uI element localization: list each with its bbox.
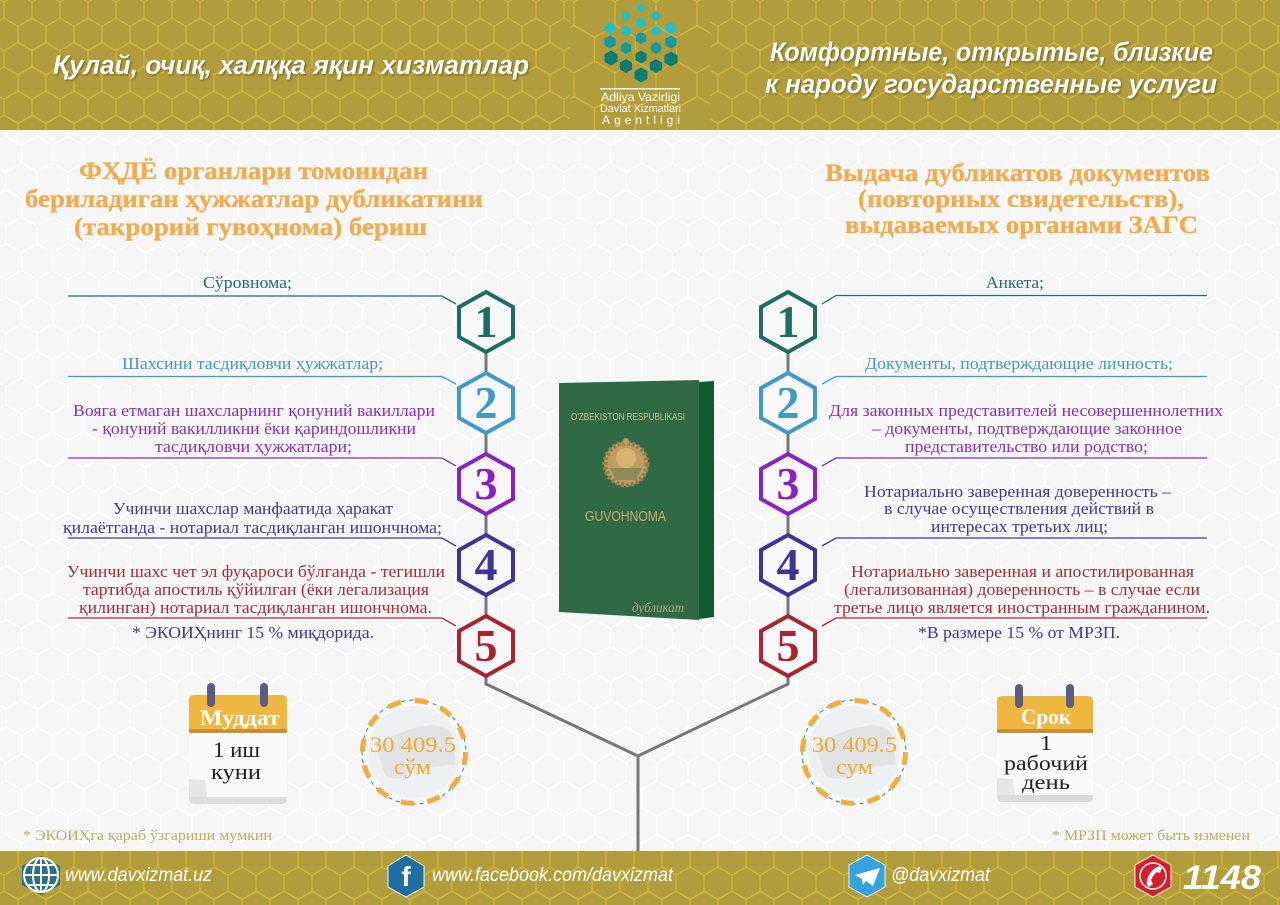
list: right: третье лицо является иностранным гражданином.	[834, 598, 1210, 617]
numbered hexagons: left: 3	[474, 458, 498, 509]
heading: right: выдаваемых органами ЗАГС	[845, 212, 1198, 239]
facebook text: www.facebook.com/davxizmat	[432, 865, 674, 886]
heading: left: ФҲДЁ органлари томонидан	[79, 158, 428, 185]
heading: left: (такрорий гувоҳнома) бериш	[74, 214, 427, 241]
document booklet: O'ZBEKISTON RESPUBLIKASI	[571, 412, 685, 423]
numbered hexagons: right: 2	[776, 377, 800, 428]
list: left: Вояга етмаган шахсларнинг қонуний вакиллари	[73, 401, 435, 420]
header title: Russian	[765, 37, 1217, 99]
heading: right: (повторных свидетельств),	[858, 186, 1184, 213]
icon: facebook: f	[401, 861, 411, 892]
calendar: right: рабочий	[1004, 751, 1088, 775]
list: left: тартибда апостиль қўйилган (ёки легализация	[83, 580, 429, 599]
list: left: тасдиқловчи ҳужжатлари;	[155, 437, 352, 456]
calendar: left: куни	[211, 759, 261, 784]
logo: Agentligi	[602, 113, 680, 127]
logo: Adliya Vazirligi	[601, 90, 680, 104]
icon: globe	[22, 856, 60, 895]
document booklet	[559, 380, 714, 620]
heading: left	[25, 158, 483, 241]
list: left: қилаётганда - нотариал тасдиқланган ишончнома;	[63, 518, 442, 537]
numbered hexagons: right: 3	[776, 458, 800, 509]
list: right: Анкета;	[986, 273, 1044, 292]
list: right: Для законных представителей несовершеннолетних	[829, 401, 1224, 420]
footnote: right: * МРЗП может быть изменен	[1052, 828, 1250, 844]
list: left	[63, 273, 445, 642]
icon: phone	[1135, 855, 1171, 897]
price badge: left	[362, 700, 466, 804]
leader lines: right	[822, 296, 1207, 626]
calendar: right	[997, 684, 1093, 802]
website text: www.davxizmat.uz	[65, 865, 212, 886]
list: right	[829, 273, 1224, 642]
list: right: *В размере 15 % от МРЗП.	[918, 623, 1120, 642]
heading: right: Выдача дубликатов документов	[825, 160, 1210, 187]
numbered hexagons: right: 4	[776, 539, 800, 590]
footer band	[0, 851, 1280, 905]
connector tree	[486, 300, 788, 851]
calendar: right: Срок	[1021, 704, 1071, 729]
calendar: left: 1 иш	[213, 737, 260, 762]
numbered hexagons: left: 5	[474, 620, 498, 671]
price badge: left: 30 409.5	[370, 732, 456, 757]
list: left: Сўровнома;	[203, 273, 292, 292]
header title: Uzbek: Қулай, очиқ, халққа яқин хизматлар	[53, 50, 529, 80]
logo	[600, 4, 681, 127]
leader lines: left	[68, 296, 456, 626]
icon: telegram	[849, 855, 885, 897]
calendar: left	[189, 683, 287, 804]
header band	[0, 0, 1280, 130]
list: right: интересах третьих лиц;	[931, 517, 1108, 536]
numbered hexagons: left: 1	[474, 296, 498, 347]
heading: left: бериладиган ҳужжатлар дубликатини	[25, 186, 483, 213]
list: left: Шахсини тасдиқловчи ҳужжатлар;	[122, 354, 383, 373]
numbered hexagons: right	[761, 292, 815, 676]
list: left: - қонуний вакилликни ёки қариндошликни	[92, 419, 416, 438]
telegram text: @davxizmat	[891, 865, 991, 886]
document booklet: GUVOHNOMA	[585, 508, 666, 525]
header title: Russian: к народу государственные услуги	[765, 69, 1217, 99]
heading: right	[825, 160, 1210, 239]
price badge: right	[802, 700, 906, 804]
list: right: представительство или родство;	[905, 437, 1148, 456]
document booklet: дубликат	[632, 601, 684, 616]
calendar: left: Муддат	[200, 705, 280, 730]
footnote: left: * ЭКОИҲга қараб ўзгариши мумкин	[23, 828, 272, 844]
list: right: Нотариально заверенная доверенность –	[864, 482, 1172, 501]
hotline number: 1148	[1183, 859, 1261, 897]
emblem	[604, 438, 648, 486]
list: left: * ЭКОИҲнинг 15 % миқдорида.	[132, 623, 374, 642]
calendar: right: 1	[1040, 731, 1052, 755]
price badge: left: сўм	[394, 754, 431, 779]
calendar: right: день	[1022, 770, 1070, 794]
list: right: в случае осуществления действий в	[884, 499, 1154, 518]
logo: Davlat Xizmatlari	[600, 103, 681, 115]
numbered hexagons: right: 5	[776, 620, 800, 671]
price badge: right: 30 409.5	[812, 732, 897, 757]
list: right: (легализованная) доверенность – в случае если	[844, 580, 1200, 599]
list: left: қилинган) нотариал тасдиқланган ишончнома.	[79, 598, 432, 617]
list: right: – документы, подтверждающие законное	[871, 419, 1182, 438]
list: left: Учинчи шахслар манфаатида ҳаракат	[113, 499, 394, 518]
numbered hexagons: left: 2	[474, 377, 498, 428]
price badge: right: сум	[836, 754, 873, 779]
numbered hexagons: left: 4	[474, 539, 498, 590]
numbered hexagons: left	[459, 292, 513, 676]
numbered hexagons: right: 1	[776, 296, 800, 347]
header title: Russian: Комфортные, открытые, близкие	[770, 37, 1213, 67]
list: right: Документы, подтверждающие личность;	[865, 354, 1173, 373]
list: left: Учинчи шахс чет эл фуқароси бўлганда - тегишли	[67, 562, 445, 581]
list: right: Нотариально заверенная и апостилированная	[851, 562, 1194, 581]
icon: facebook	[388, 855, 424, 897]
